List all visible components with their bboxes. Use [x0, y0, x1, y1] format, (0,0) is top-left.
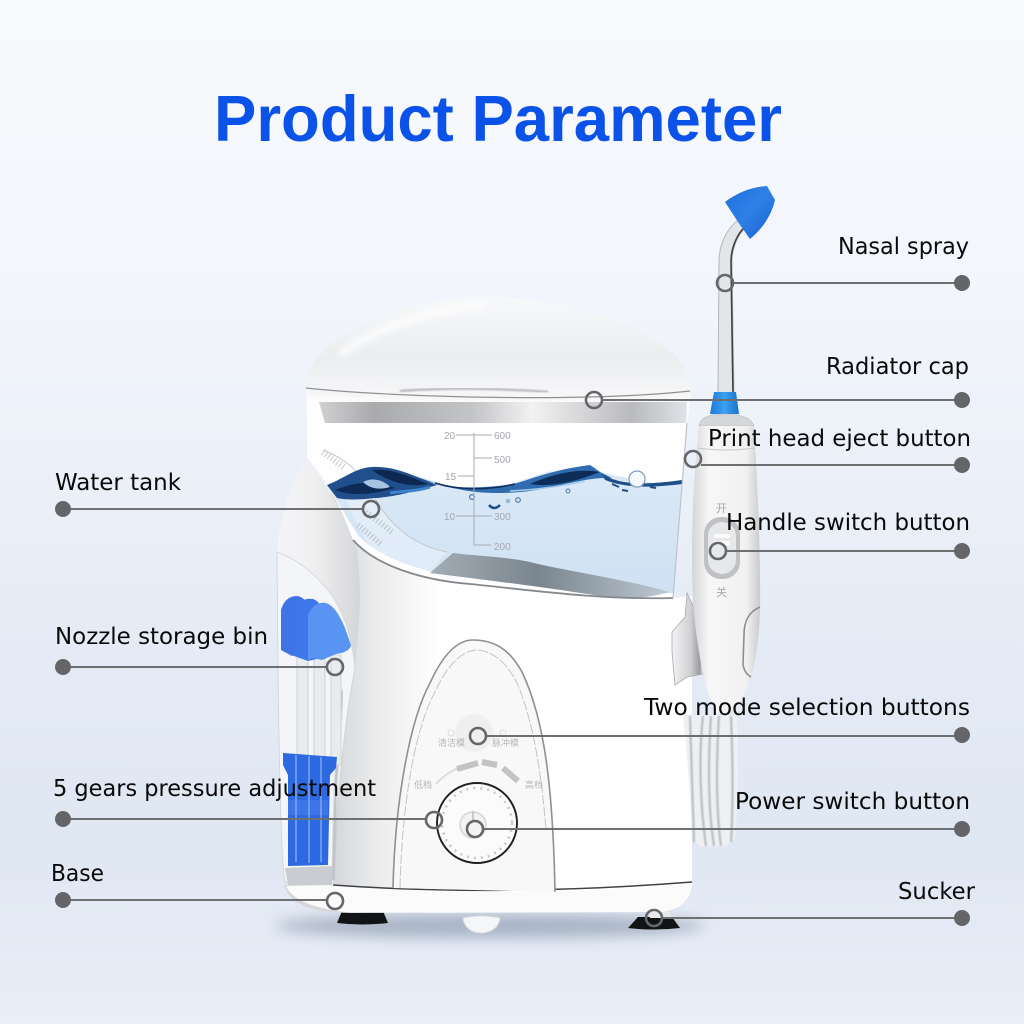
tank lower edge: [353, 540, 673, 598]
floor shadow: [275, 914, 705, 938]
dark inner reservoir: [430, 553, 669, 598]
callout: Sucker: Sucker: [898, 879, 976, 905]
measurement scale: 600: [494, 431, 511, 442]
callout: Handle switch button: Handle switch button: [726, 510, 970, 536]
hose coil: [683, 715, 738, 847]
measurement scale: 200: [494, 542, 511, 553]
callout: Print head eject button: Print head eject button: [708, 426, 971, 452]
pressure scale: 高档: [525, 779, 543, 790]
callout: Sucker: [646, 879, 976, 926]
rear shoulder: [277, 460, 360, 667]
callout: Nasal spray: [717, 234, 970, 291]
callout: Radiator cap: [586, 354, 970, 408]
handle switch: 开: [716, 500, 727, 516]
measurement scale: 10: [444, 512, 456, 523]
measurement scale: 20: [444, 431, 456, 442]
nozzle tube: [718, 218, 747, 395]
callout: Base: Base: [51, 861, 104, 887]
side button: [743, 607, 760, 677]
mode button: 清洁模: [438, 737, 465, 748]
callout: Nozzle storage bin: Nozzle storage bin: [55, 624, 268, 650]
collar ring: [699, 414, 754, 426]
handle switch: 关: [716, 584, 727, 600]
callout: Two mode selection buttons: [470, 695, 970, 744]
product illustration: water flosser: [275, 186, 775, 938]
handle switch: [704, 500, 740, 600]
measurement scale: 300: [494, 512, 511, 523]
mode button: 脉冲模: [492, 737, 519, 748]
title: Product Parameter: [214, 82, 782, 155]
measurement scale: OZ: [447, 415, 461, 426]
callout: Base: [51, 861, 343, 909]
blue collar: [710, 392, 739, 414]
pressure scale: 低档: [414, 779, 432, 790]
nozzle storage bin: [277, 552, 355, 885]
handle bracket: [672, 593, 703, 685]
callout: Radiator cap: Radiator cap: [826, 354, 969, 380]
callout: Power switch button: Power switch button: [735, 789, 970, 815]
blue connectors: [283, 753, 337, 866]
tank lid: [305, 297, 691, 401]
callout: Two mode selection buttons: Two mode selection buttons: [643, 695, 970, 721]
inner partition: [323, 450, 447, 572]
callout: Power switch button: [467, 789, 970, 837]
water tank: [307, 395, 691, 598]
callout: Water tank: Water tank: [55, 470, 182, 496]
measurement scale: 500: [494, 455, 511, 466]
measurement scale: [444, 415, 511, 553]
water: [327, 466, 682, 593]
mode button: [438, 714, 519, 752]
blue nozzle tips: [281, 596, 351, 661]
callout: 5 gears pressure adjustment: 5 gears pressure adjustment: [53, 776, 376, 802]
handle: [692, 186, 775, 714]
pressure dial: [437, 783, 517, 863]
white nozzle tubes: [297, 650, 341, 765]
suction feet: [337, 908, 680, 933]
callout: Nozzle storage bin: [55, 624, 343, 675]
silver band: [305, 395, 691, 423]
blue nozzle tip: [725, 186, 775, 239]
main body: [284, 460, 692, 913]
callout: Water tank: [55, 470, 379, 517]
control panel arch: [393, 640, 555, 892]
callout: Handle switch button: [710, 510, 970, 559]
handle grip: [692, 426, 760, 714]
pressure scale: [414, 762, 543, 790]
wave crest: [327, 465, 682, 508]
callout: 5 gears pressure adjustment: [53, 776, 442, 828]
measurement scale: ML: [491, 415, 505, 426]
callout: Print head eject button: [685, 426, 971, 473]
measurement scale: 15: [445, 472, 457, 483]
callout: Nasal spray: Nasal spray: [838, 234, 969, 260]
